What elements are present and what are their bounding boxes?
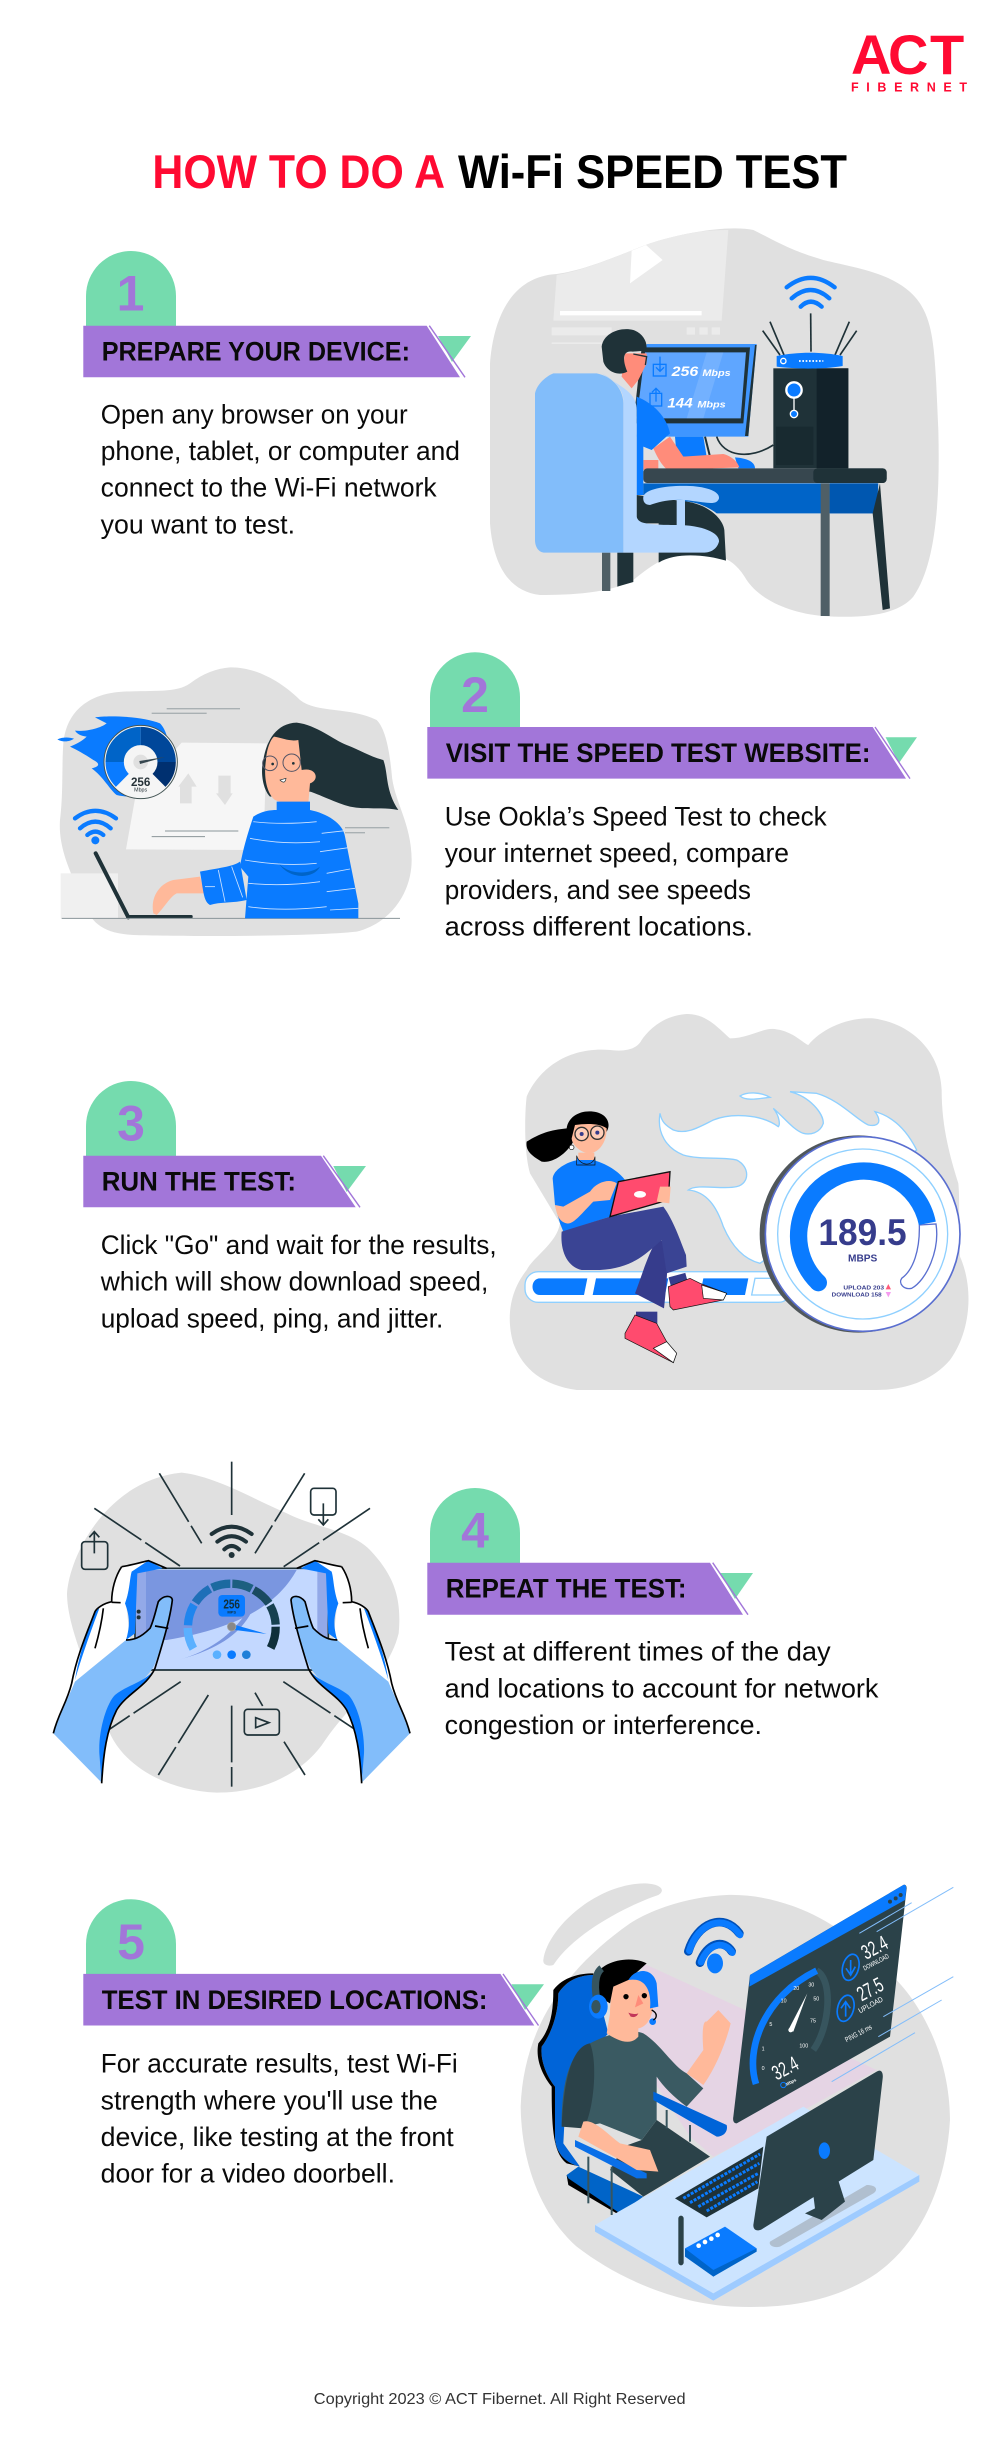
illustration: hands holding phone with speed gauge: MPS <box>227 1609 236 1614</box>
illustration: gamer at desk with speed dashboard <box>521 1883 953 2307</box>
step 3 ribbon heading: RUN THE TEST: <box>102 1167 296 1197</box>
step 5 body text <box>101 2049 458 2189</box>
step 2 body text: providers, and see speeds <box>445 875 751 905</box>
step 5 body text: door for a video doorbell. <box>101 2159 395 2189</box>
illustration: woman with tablet and 189.5 Mbps gauge <box>510 1014 968 1390</box>
illustration: hands holding phone with speed gauge <box>53 1462 410 1793</box>
step 5 body text: strength where you'll use the <box>101 2085 438 2115</box>
step 2 number badge <box>430 652 520 728</box>
step 2 panel <box>57 652 917 942</box>
illustration: gamer at desk with speed dashboard: 5 <box>769 2022 772 2028</box>
step 4 panel <box>53 1462 879 1793</box>
step 1 number badge: 1 <box>117 266 144 322</box>
step 1 body text: Open any browser on your <box>101 399 408 429</box>
step 3 body text <box>100 1230 497 1333</box>
illustration: gamer at desk with speed dashboard: 30 <box>808 1983 814 1989</box>
step 1 body text: phone, tablet, or computer and <box>101 436 460 466</box>
illustration: gamer at desk with speed dashboard: 10 <box>781 1999 787 2005</box>
illustration: woman with tablet and 189.5 Mbps gauge: MBPS <box>848 1254 878 1265</box>
step 5 ribbon heading <box>83 1974 544 2026</box>
illustration: woman with tablet and 189.5 Mbps gauge: UPLOAD 203 <box>843 1285 884 1291</box>
step 4 body text: and locations to account for network <box>445 1673 879 1703</box>
illustration: gamer at desk with speed dashboard: PING 16 ms <box>843 2022 874 2044</box>
illustration: woman with speed gauge: Mbps <box>134 788 148 794</box>
logo: ACT Fibernet: ACT <box>851 23 964 86</box>
illustration: gamer at desk with speed dashboard: 0 <box>762 2066 765 2072</box>
step 1 body text: you want to test. <box>101 509 295 539</box>
illustration: man at computer with router: Mbps <box>697 399 726 409</box>
illustration: woman with tablet and 189.5 Mbps gauge: 189.5 <box>818 1211 907 1253</box>
step 5 number badge <box>86 1899 176 1974</box>
step 2 body text: across different locations. <box>445 912 753 942</box>
step 1 ribbon heading <box>83 326 471 377</box>
illustration: man at computer with router <box>490 228 939 617</box>
illustration: gamer at desk with speed dashboard: 75 <box>810 2019 816 2025</box>
illustration: gamer at desk with speed dashboard: 32.4 <box>858 1932 892 1964</box>
step 5 number badge: 5 <box>117 1914 145 1970</box>
step 5 body text: For accurate results, test Wi-Fi <box>101 2049 458 2079</box>
step 3 panel <box>83 1014 968 1390</box>
step 4 ribbon heading: REPEAT THE TEST: <box>446 1574 686 1604</box>
step 4 body text: Test at different times of the day <box>445 1637 831 1667</box>
step 2 number badge: 2 <box>461 667 489 723</box>
step 2 ribbon heading: VISIT THE SPEED TEST WEBSITE: <box>446 738 870 768</box>
illustration: hands holding phone with speed gauge: 256 <box>223 1598 240 1612</box>
step 3 number badge: 3 <box>117 1096 145 1152</box>
step 2 body text: Use Ookla’s Speed Test to check <box>445 802 827 832</box>
illustration: gamer at desk with speed dashboard: DOWNLOAD <box>862 1953 890 1972</box>
step 1 body text <box>101 399 460 539</box>
illustration: man at computer with router: 144 <box>667 394 693 410</box>
step 2 ribbon heading <box>427 727 917 779</box>
step 3 ribbon heading <box>83 1156 366 1207</box>
left hand <box>53 1561 172 1783</box>
illustration: woman with tablet and 189.5 Mbps gauge: DOWNLOAD 158 <box>832 1293 882 1299</box>
illustration: gamer at desk with speed dashboard: 27.5 <box>853 1973 888 2006</box>
illustration: man at computer with router: Mbps <box>702 368 731 378</box>
illustration: gamer at desk with speed dashboard: UPLOAD <box>857 1995 884 2015</box>
illustration: gamer at desk with speed dashboard: 100 <box>799 2043 808 2049</box>
step 5 ribbon heading: TEST IN DESIRED LOCATIONS: <box>102 1985 487 2015</box>
illustration: gamer at desk with speed dashboard: 20 <box>793 1986 799 1992</box>
step 5 body text: device, like testing at the front <box>101 2122 454 2152</box>
illustration: gamer at desk with speed dashboard: 32.4 <box>768 2052 803 2085</box>
step 2 body text: your internet speed, compare <box>445 838 789 868</box>
illustration: gamer at desk with speed dashboard: 1 <box>762 2047 765 2053</box>
right hand <box>291 1561 410 1783</box>
step 1 panel <box>83 228 939 617</box>
illustration: man at computer with router: 256 <box>671 363 699 379</box>
illustration: gamer at desk with speed dashboard: 50 <box>813 1997 819 2003</box>
footer copyright: Copyright 2023 © ACT Fibernet. All Right Reserved <box>314 2391 686 2408</box>
step 3 body text: upload speed, ping, and jitter. <box>101 1303 443 1333</box>
step 4 body text <box>445 1637 879 1740</box>
step 4 number badge <box>430 1488 520 1563</box>
step 3 number badge <box>86 1081 176 1156</box>
illustration: woman with speed gauge <box>57 667 412 936</box>
title <box>152 145 847 198</box>
step 4 ribbon heading <box>427 1563 753 1615</box>
step 4 body text: congestion or interference. <box>445 1710 762 1740</box>
title: HOW TO DO A <box>152 145 445 198</box>
step 1 ribbon heading: PREPARE YOUR DEVICE: <box>102 337 410 367</box>
step 2 body text <box>445 802 827 942</box>
step 1 body text: connect to the Wi-Fi network <box>101 473 437 503</box>
step 5 panel <box>83 1883 953 2307</box>
step 3 body text: which will show download speed, <box>100 1267 488 1297</box>
logo: ACT Fibernet: FIBERNET <box>851 81 967 95</box>
step 4 number badge: 4 <box>461 1503 489 1559</box>
title: Wi-Fi SPEED TEST <box>458 145 847 198</box>
step 3 body text: Click "Go" and wait for the results, <box>101 1230 497 1260</box>
step 1 number badge <box>86 251 176 326</box>
illustration: woman with speed gauge: 256 <box>131 776 151 789</box>
illustration: gamer at desk with speed dashboard: Mbps <box>785 2077 798 2087</box>
